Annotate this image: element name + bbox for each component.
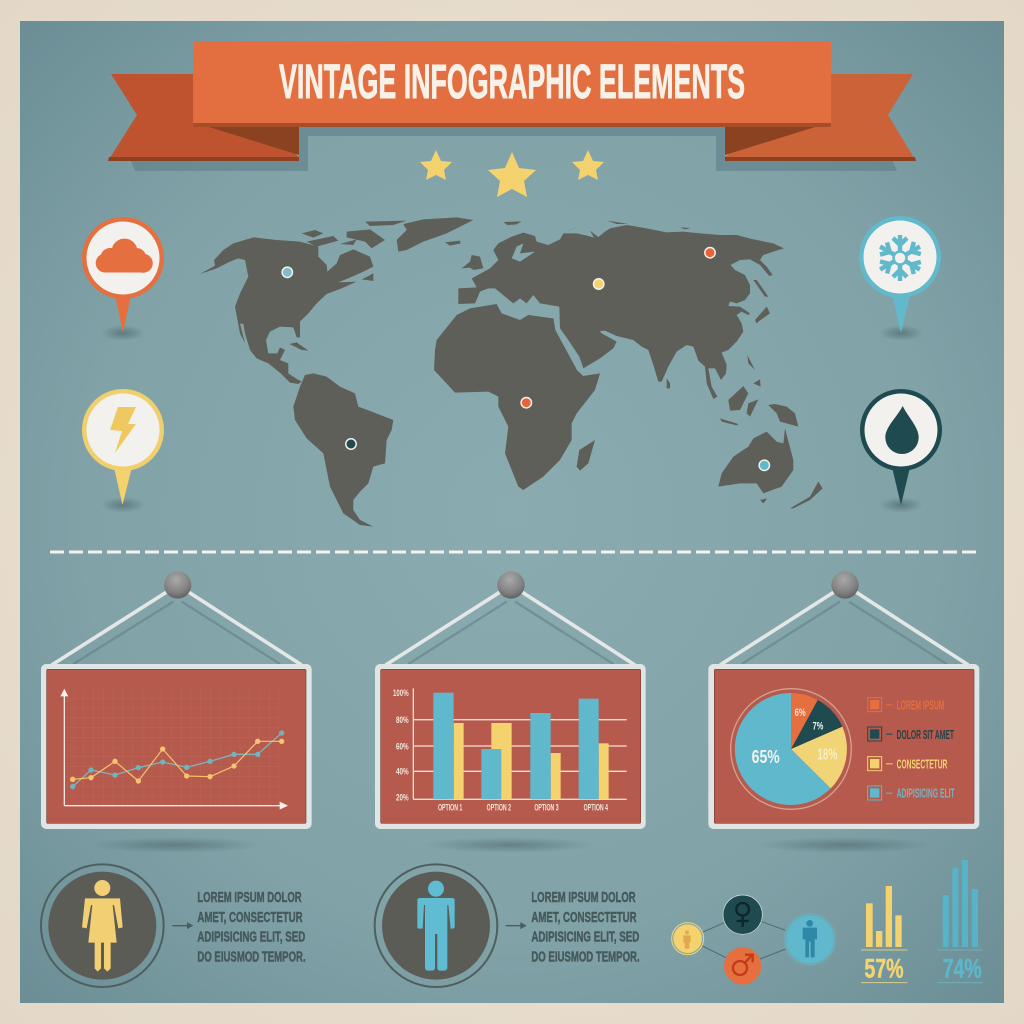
nail	[831, 571, 859, 599]
bars option 1	[433, 693, 464, 799]
connector lines	[688, 915, 810, 966]
man text: AMET, CONSECTETUR	[531, 909, 637, 926]
woman arrow	[172, 923, 192, 928]
madagascar	[577, 440, 595, 471]
ribbon right tail	[725, 74, 916, 161]
star centre	[488, 152, 536, 197]
label 18 percent: 18%	[817, 747, 837, 764]
marker south america	[346, 439, 356, 449]
legend consectetur: CONSECTETUR	[897, 757, 948, 772]
label 6 percent: 6%	[795, 707, 806, 719]
board face	[714, 669, 974, 823]
woman block	[41, 864, 306, 987]
iceland	[445, 241, 461, 246]
x labels: OPTION 2	[487, 802, 511, 812]
label 65 percent: 65%	[752, 746, 780, 767]
marker north america	[282, 267, 292, 277]
board shadow	[757, 837, 930, 853]
americas and arctic	[200, 217, 473, 527]
y labels	[393, 688, 409, 802]
arctic islands	[302, 221, 407, 281]
hanging wire	[386, 585, 635, 665]
man ring	[375, 864, 497, 987]
orange male node	[724, 947, 761, 985]
pie chart	[735, 693, 847, 805]
y labels: 100%	[393, 688, 409, 698]
legend adipisicing elit: ADIPISICING ELIT	[897, 786, 955, 801]
ribbon cast shadow	[131, 127, 897, 171]
greenland	[397, 217, 473, 252]
bars option 2	[481, 723, 512, 799]
board: line chart	[41, 571, 312, 853]
woman text: ADIPISICING ELIT, SED	[197, 928, 305, 945]
board face	[47, 669, 306, 823]
south america	[293, 373, 393, 527]
x labels: OPTION 4	[584, 802, 608, 812]
yellow stat bars	[866, 886, 902, 947]
star right	[572, 150, 604, 180]
bars option 4	[579, 699, 609, 799]
woman text: AMET, CONSECTETUR	[197, 909, 303, 926]
new zealand	[790, 482, 823, 508]
blue stat value: 74%	[943, 953, 982, 983]
hanging wire	[52, 585, 302, 665]
axes	[64, 693, 283, 806]
label 7 percent: 7%	[813, 720, 824, 732]
baltic sea	[512, 243, 535, 262]
legend dolor sit amet: DOLOR SIT AMET	[897, 727, 954, 742]
africa	[434, 304, 600, 490]
man figure	[417, 881, 455, 971]
blue person node	[784, 913, 836, 966]
x labels: OPTION 3	[534, 802, 559, 812]
board shadow	[423, 837, 597, 853]
marker siberia	[705, 248, 715, 258]
x labels: OPTION 1	[438, 802, 462, 812]
pin: water drop	[860, 389, 942, 513]
marker central asia	[594, 279, 604, 289]
eurasia	[458, 225, 784, 399]
world map	[200, 217, 823, 527]
board frame	[41, 664, 312, 829]
woman text	[197, 889, 306, 965]
divider	[50, 550, 976, 554]
man disc	[382, 872, 490, 980]
stars	[420, 150, 604, 197]
slice 65 percent	[735, 693, 831, 805]
blue series	[70, 730, 284, 789]
hanging wire	[720, 585, 968, 665]
slice 18 percent	[791, 727, 847, 788]
nail	[164, 571, 191, 599]
ribbon right fold	[725, 122, 831, 155]
tasmania	[760, 498, 767, 503]
woman text: DO EIUSMOD TEMPOR.	[197, 948, 306, 965]
y labels: 20%	[396, 792, 409, 802]
arctic russia islands	[503, 221, 691, 239]
x arrow	[280, 802, 288, 810]
uk	[462, 255, 483, 270]
pin: cloud	[82, 217, 164, 341]
board frame	[708, 664, 979, 829]
ribbon main band	[193, 41, 831, 123]
star left	[420, 150, 452, 180]
man text: LOREM IPSUM DOLOR	[531, 889, 636, 906]
new guinea	[768, 404, 798, 427]
australia	[718, 428, 793, 493]
blue stat rules	[937, 950, 983, 983]
legend	[868, 697, 955, 801]
yellow person node	[672, 923, 704, 955]
pin: lightning	[82, 389, 164, 513]
pins	[82, 216, 942, 513]
europe asia africa oceania	[434, 221, 823, 508]
gridlines and axis	[413, 688, 627, 799]
nail	[497, 571, 525, 599]
man arrow	[506, 923, 525, 928]
board: pie chart	[708, 571, 979, 853]
gender network and stat bars	[672, 860, 983, 985]
man block	[375, 864, 640, 987]
north america	[200, 237, 373, 384]
pin: snowflake	[859, 216, 941, 341]
woman disc	[48, 872, 156, 980]
ribbon left tail	[108, 74, 299, 161]
man text: DO EIUSMOD TEMPOR.	[531, 948, 640, 965]
board: bar chart	[375, 571, 646, 853]
grid	[64, 689, 279, 806]
ribbon band edge	[193, 123, 831, 127]
woman text: LOREM IPSUM DOLOR	[197, 889, 302, 906]
marker africa	[521, 398, 532, 408]
man text: ADIPISICING ELIT, SED	[531, 928, 639, 945]
board frame	[375, 664, 646, 829]
blue stat bars	[943, 860, 978, 947]
slice 7 percent	[791, 700, 842, 749]
yellow stat value: 57%	[864, 953, 904, 983]
bars option 3	[530, 713, 561, 799]
legend lorem ipsum: LOREM IPSUM	[897, 697, 944, 712]
board shadow	[90, 837, 263, 853]
cuba	[289, 342, 308, 351]
y arrow	[60, 689, 68, 696]
woman ring	[41, 864, 164, 987]
sakhalin and japan	[753, 280, 770, 323]
indonesia and philippines	[720, 355, 761, 425]
ribbon tail edges	[108, 157, 916, 161]
pie ring	[731, 689, 851, 809]
ribbon banner	[108, 41, 916, 171]
sri lanka	[667, 378, 670, 388]
dark female node	[723, 895, 762, 934]
y labels: 40%	[396, 766, 409, 776]
yellow series	[70, 739, 284, 784]
y labels: 80%	[396, 715, 409, 725]
board face	[381, 669, 641, 823]
yellow stat rules	[861, 950, 907, 983]
x labels	[438, 802, 608, 812]
marker australia	[759, 460, 770, 470]
man text	[531, 889, 640, 965]
ribbon left fold	[193, 122, 299, 155]
slice 6 percent	[791, 693, 818, 749]
y labels: 60%	[396, 741, 409, 751]
map markers	[282, 248, 770, 470]
woman figure	[82, 880, 123, 972]
